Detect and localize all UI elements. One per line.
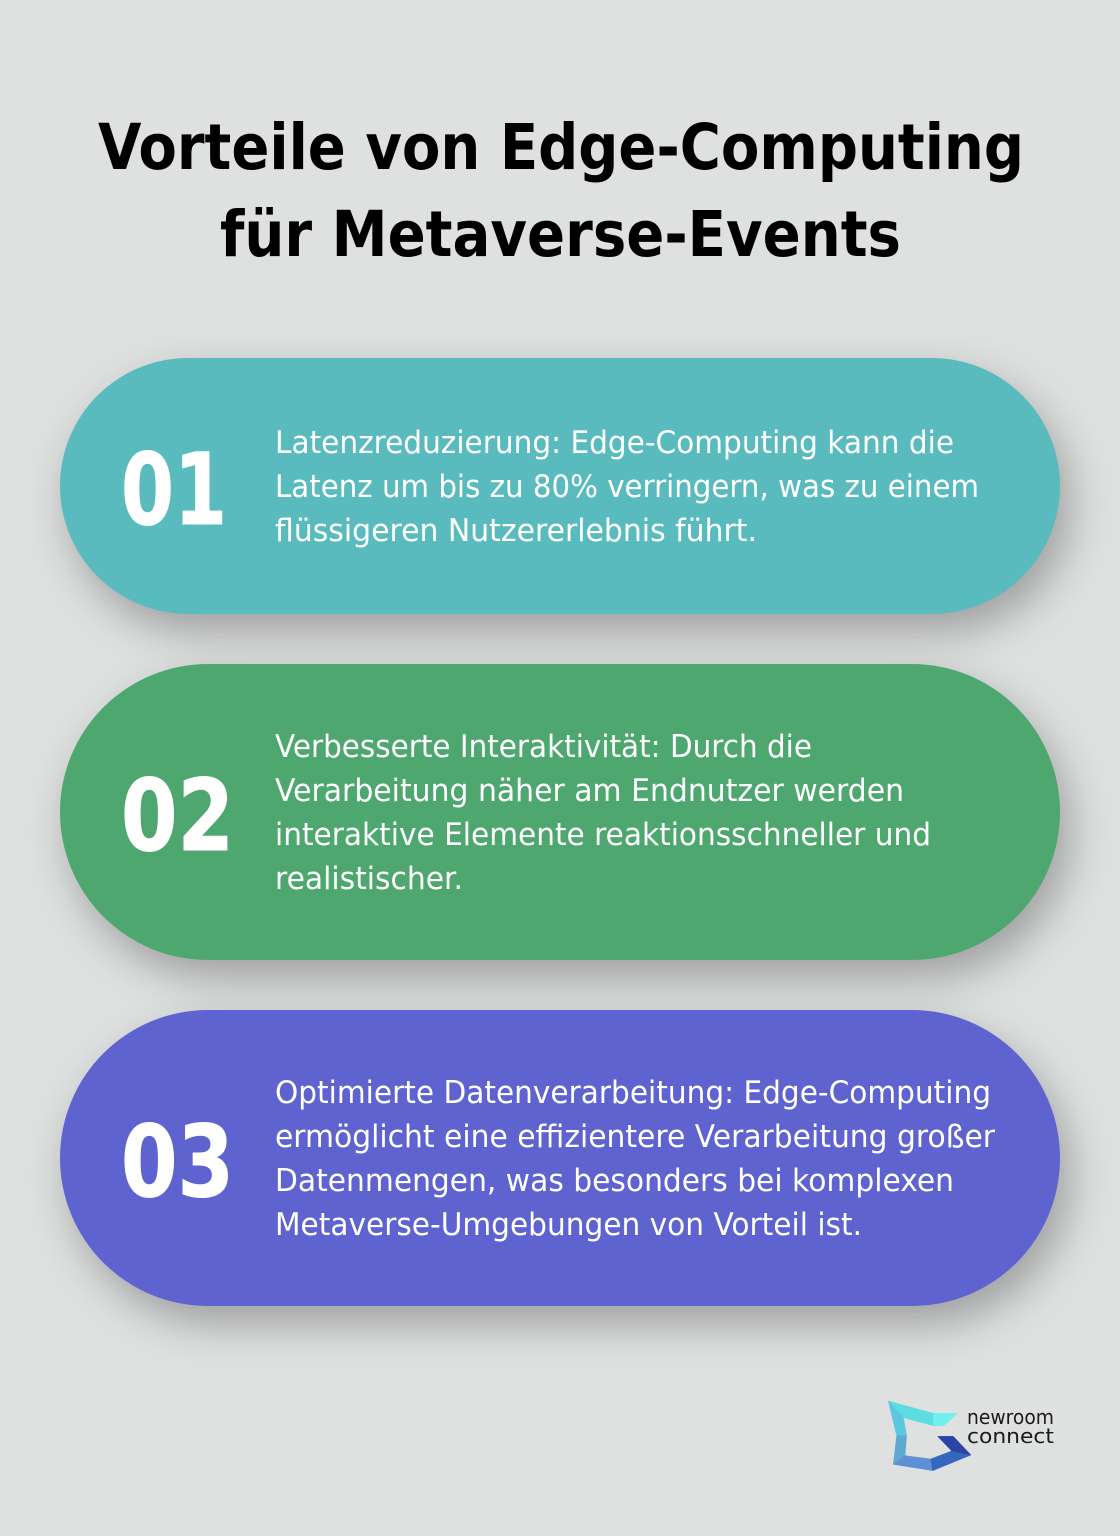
- logo wordmark: newroom: [967, 1405, 1054, 1429]
- text block 02: Verbesserte Interaktivität: Durch die: [275, 729, 812, 765]
- text block 03: ermöglicht eine effizientere Verarbeitung großer: [275, 1119, 995, 1155]
- panel: 03 Optimierte Datenverarbeitung: [60, 1010, 1060, 1306]
- title: für Metaverse-Events: [220, 198, 901, 271]
- text block 03: Metaverse-Umgebungen von Vorteil ist.: [275, 1207, 862, 1243]
- text block 02: Verarbeitung näher am Endnutzer werden: [275, 773, 904, 809]
- logo wordmark: [967, 1405, 1054, 1448]
- title: Vorteile von Edge-Computing: [98, 111, 1024, 184]
- text block 03: Datenmengen, was besonders bei komplexen: [275, 1163, 954, 1199]
- title: [98, 111, 1024, 271]
- pill background 03: [60, 1010, 1060, 1306]
- pill background 02: [60, 664, 1060, 960]
- number 03: 03: [121, 1105, 234, 1220]
- text block 02: interaktive Elemente reaktionsschneller und: [275, 817, 931, 853]
- panel: 02 Verbesserte Interaktivität: [60, 664, 1060, 960]
- icon: logo mark: [888, 1401, 971, 1471]
- text block 03: [275, 1075, 995, 1243]
- text block 02: [275, 729, 931, 897]
- text block 02: realistischer.: [275, 861, 463, 897]
- text block 01: flüssigeren Nutzererlebnis führt.: [275, 513, 757, 549]
- number 02: 02: [121, 759, 234, 874]
- logo wordmark: connect: [967, 1424, 1054, 1448]
- number 01: 01: [121, 433, 227, 548]
- logo: newroom connect: [888, 1401, 1054, 1471]
- text block 01: Latenz um bis zu 80% verringern, was zu einem: [275, 469, 979, 505]
- text block 03: Optimierte Datenverarbeitung: Edge-Computing: [275, 1075, 991, 1111]
- pill background 01: [60, 358, 1060, 614]
- text block 01: [275, 425, 979, 549]
- text block 01: Latenzreduzierung: Edge-Computing kann die: [275, 425, 954, 461]
- panel: 01 Latenzreduzierung: [60, 358, 1060, 614]
